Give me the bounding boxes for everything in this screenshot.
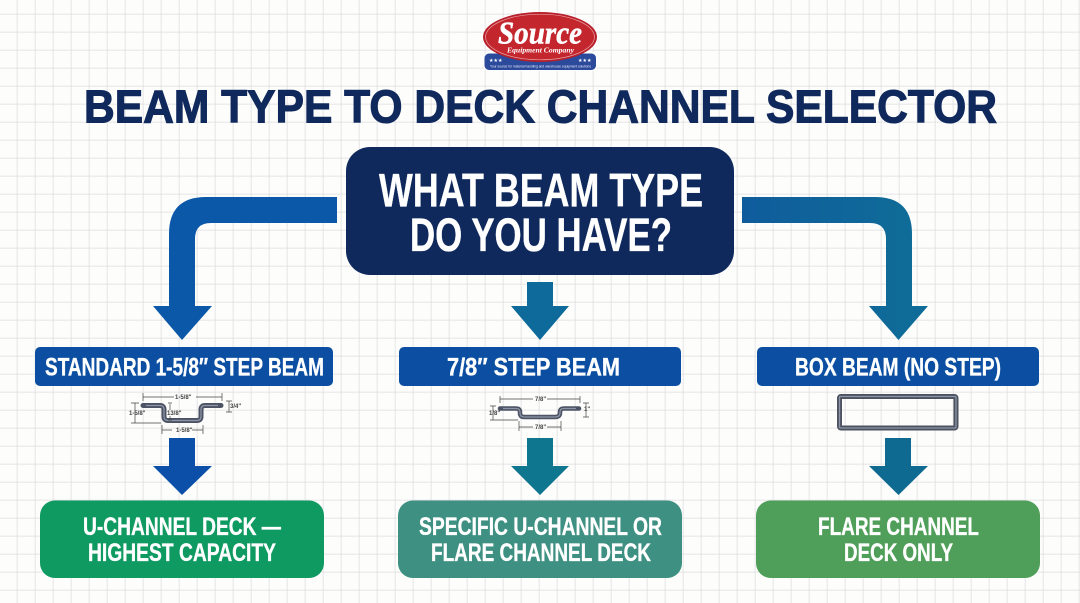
diagram: box beam profile — [840, 396, 956, 428]
diagram: standard step beam profile: 3/4" — [230, 404, 241, 410]
label: standard step beam — [35, 347, 333, 386]
title: BEAM TYPE TO DECK CHANNEL SELECTOR — [84, 80, 997, 132]
logo: Source Equipment Company: Your source for material handling and warehouse equipment solutions — [490, 64, 591, 68]
arrow: question to 7/8 step beam — [511, 282, 569, 340]
question box: DO YOU HAVE? — [410, 208, 672, 261]
diagram: standard step beam profile: 1-5/8" — [176, 428, 193, 434]
result: flare channel deck only: FLARE CHANNEL — [818, 513, 979, 541]
diagram: 7/8 step beam profile — [489, 396, 590, 431]
arrow: 7/8 beam to deck choice — [511, 438, 569, 495]
arrow: question to standard step beam — [153, 197, 337, 340]
diagram: 7/8 step beam profile: 1/8" — [489, 411, 500, 417]
arrow: box beam to flare channel deck — [869, 438, 928, 495]
result: flare channel deck only: DECK ONLY — [844, 539, 953, 567]
label: 7/8 step beam — [399, 347, 681, 386]
diagram: 7/8 step beam profile: 7/8" — [535, 397, 546, 403]
diagram: standard step beam profile: 13/8" — [167, 411, 182, 417]
diagram: 7/8 step beam profile: 7/8" — [535, 425, 546, 431]
label: 7/8 step beam: 7/8″ STEP BEAM — [447, 354, 620, 382]
label: box beam — [757, 347, 1039, 386]
question box — [346, 147, 734, 275]
result: U-channel deck: HIGHEST CAPACITY — [88, 539, 276, 567]
result: U-channel deck: U-CHANNEL DECK — — [83, 513, 281, 541]
diagram: standard step beam profile — [129, 393, 241, 434]
result: flare channel deck only — [756, 500, 1040, 578]
result: U-channel deck — [40, 500, 324, 578]
arrow: standard beam to U-channel deck — [153, 438, 212, 495]
label: box beam: BOX BEAM (NO STEP) — [795, 354, 1001, 382]
diagram: 7/8 step beam profile: 1" — [584, 407, 590, 413]
logo: Source Equipment Company: Equipment Company — [506, 46, 575, 54]
arrow: question to box beam — [742, 197, 928, 340]
logo: Source Equipment Company: Source — [498, 14, 582, 50]
result: specific U-channel or flare channel deck — [398, 500, 682, 578]
result: specific U-channel or flare channel deck: SPECIFIC U-CHANNEL OR — [419, 513, 662, 541]
logo: Source Equipment Company — [483, 12, 597, 70]
label: standard step beam: STANDARD 1-5/8″ STEP BEAM — [45, 354, 324, 382]
question box: WHAT BEAM TYPE — [379, 164, 703, 216]
result: specific U-channel or flare channel deck: FLARE CHANNEL DECK — [431, 539, 651, 567]
diagram: standard step beam profile: 1-5/8" — [175, 395, 192, 401]
diagram: standard step beam profile: 1-5/8" — [129, 411, 146, 417]
logo: Source Equipment Company: ★★★ — [489, 58, 503, 64]
logo: Source Equipment Company: ★★★ — [578, 58, 592, 64]
